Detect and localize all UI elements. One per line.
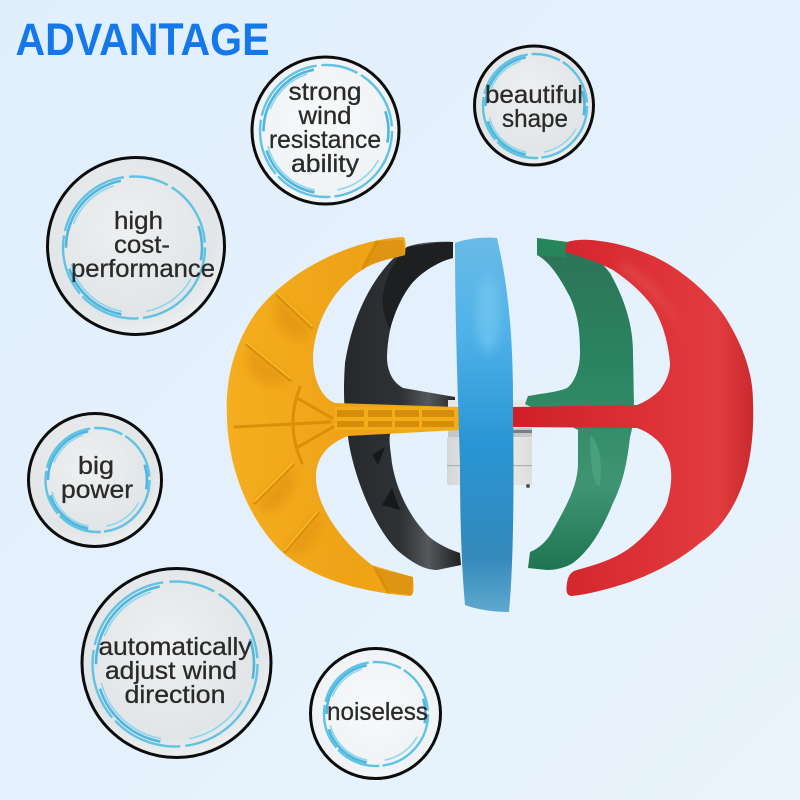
circle: high cost-performance: cost-	[114, 231, 170, 259]
circle: automatically adjust wind direction: adjust wind	[105, 657, 237, 685]
circle: strong wind resistance ability: wind	[297, 102, 352, 130]
circle: big power	[28, 414, 162, 546]
circle: strong wind resistance ability: ability	[291, 150, 360, 178]
circle: high cost-performance	[48, 158, 224, 334]
circle: big power: big	[78, 452, 114, 480]
circle: beautiful shape: beautiful	[485, 81, 583, 109]
circle: strong wind resistance ability	[252, 57, 399, 204]
circle: noiseless: noiseless	[327, 698, 428, 726]
blade: black	[344, 242, 461, 570]
motor	[447, 400, 532, 488]
circle: strong wind resistance ability: strong	[288, 78, 362, 106]
circle: strong wind resistance ability: resistance	[269, 126, 381, 154]
blade: green	[525, 238, 634, 570]
circle: high cost-performance: high	[114, 207, 163, 235]
circle: beautiful shape	[474, 46, 594, 165]
circle: high cost-performance: performance	[71, 255, 215, 283]
wind turbine	[227, 237, 753, 612]
blade: yellow	[227, 237, 459, 596]
title: ADVANTAGE	[16, 14, 270, 65]
blade: red	[513, 240, 753, 596]
circle: noiseless	[310, 648, 440, 778]
circle: automatically adjust wind direction: automatically	[98, 633, 252, 661]
circle: automatically adjust wind direction: direction	[124, 681, 226, 709]
circle: big power: power	[61, 476, 133, 504]
blade: blue	[455, 238, 514, 612]
circle: automatically adjust wind direction	[82, 568, 271, 758]
circle: beautiful shape: shape	[502, 105, 568, 133]
